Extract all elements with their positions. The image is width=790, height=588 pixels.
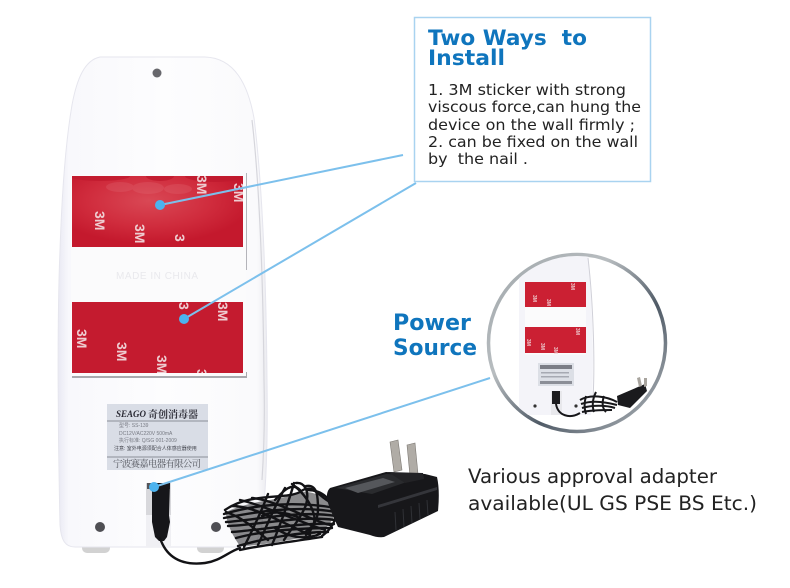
box body text: by the nail . xyxy=(428,150,528,168)
screw holes xyxy=(95,522,221,532)
device shell xyxy=(58,57,267,547)
box heading: Install xyxy=(428,46,505,70)
install info box xyxy=(414,18,650,182)
mini slot and plug xyxy=(551,391,562,415)
mini device xyxy=(519,250,593,415)
device feet xyxy=(82,540,224,553)
box body text: device on the wall firmly ; xyxy=(428,116,635,134)
made in china text: MADE IN CHINA xyxy=(116,271,198,282)
power source heading xyxy=(393,311,477,361)
box body text: 1. 3M sticker with strong xyxy=(428,81,626,99)
adapter approval text: available(UL GS PSE BS Etc.) xyxy=(468,492,757,515)
product label: 执行标准: Q/SG 001-2009 xyxy=(119,437,177,444)
mini tape marks: 3M xyxy=(531,295,537,302)
adapter body xyxy=(327,472,439,537)
product label: 奇创消毒器 xyxy=(148,408,198,421)
adapter approval text xyxy=(468,465,757,515)
circular inset xyxy=(488,250,666,432)
mini tape marks: 3M xyxy=(552,347,558,354)
mini tape marks: 3M xyxy=(525,339,531,346)
mini adapter xyxy=(617,384,647,408)
product label: DC12V/AC220V 500mA xyxy=(119,431,173,437)
red tape upper: 3 xyxy=(172,234,188,242)
callout lines xyxy=(154,155,490,487)
power source heading: Power xyxy=(393,311,471,336)
box heading xyxy=(428,26,587,70)
power slot xyxy=(146,483,171,547)
mini cable xyxy=(556,392,617,416)
product label: 宁波赛嘉电器有限公司 xyxy=(113,458,201,470)
red tape lower: 3M xyxy=(215,302,231,321)
product label: 型号: SS-139 xyxy=(119,422,149,429)
power adapter xyxy=(327,440,439,537)
red tape lower: 3M xyxy=(154,355,170,374)
adapter prongs xyxy=(390,440,418,476)
mini tape marks: 3M xyxy=(545,299,551,306)
adapter approval text: Various approval adapter xyxy=(468,465,718,488)
mounting hole xyxy=(152,68,162,78)
device body xyxy=(58,57,267,553)
red tape upper: 3M xyxy=(92,211,108,230)
red tape lower: 3M xyxy=(114,342,130,361)
red tape upper: 3M xyxy=(132,224,148,243)
red tape upper: 3M xyxy=(231,183,247,202)
red tape lower: 3 xyxy=(176,302,192,310)
callout dots xyxy=(149,200,189,492)
mini backing xyxy=(525,282,586,354)
power source heading: Source xyxy=(393,336,477,361)
box body text: 2. can be fixed on the wall xyxy=(428,133,638,151)
box body text: viscous force,can hung the xyxy=(428,98,641,116)
red tape upper: 3M xyxy=(194,175,210,194)
red tape lower: 3M xyxy=(74,329,90,348)
mini tape marks: 3M xyxy=(574,328,580,335)
power cable and tangle xyxy=(160,483,346,564)
mini red tapes xyxy=(525,282,586,353)
red tape upper xyxy=(72,176,243,247)
mini tape marks xyxy=(525,283,580,354)
product label: SEAGO xyxy=(116,409,147,419)
mini label xyxy=(538,363,574,386)
sticker backing xyxy=(71,173,247,378)
mini prongs xyxy=(637,377,647,387)
box heading: Two Ways to xyxy=(428,26,587,50)
mini tape marks: 3M xyxy=(569,283,575,290)
red tape lower xyxy=(72,302,243,373)
mini tape marks: 3M xyxy=(539,343,545,350)
power plug xyxy=(152,483,170,541)
product label: 注意: 室外电源须配合人体感应器使用 xyxy=(114,445,197,452)
box body text xyxy=(428,81,641,168)
red tape lower: 3M xyxy=(194,369,210,388)
product label xyxy=(107,404,208,470)
mini screw holes xyxy=(533,404,578,408)
